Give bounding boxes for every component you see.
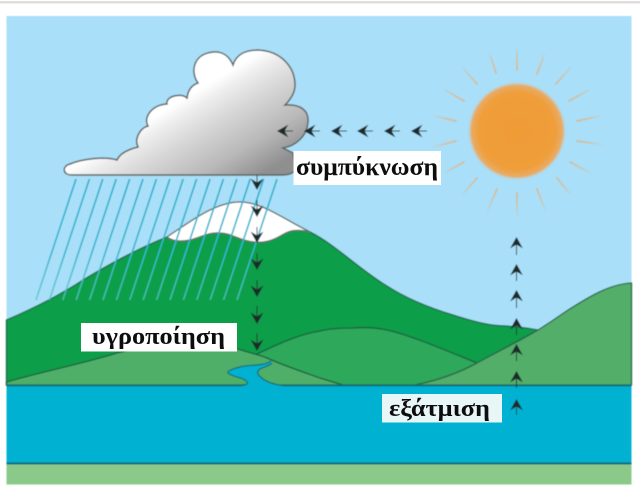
- snow cap: [167, 202, 310, 242]
- sun: [468, 82, 566, 180]
- shore land strip: [6, 464, 632, 484]
- sky background: [6, 16, 632, 388]
- label: condensation: συμπύκνωση: [296, 154, 438, 181]
- cloud: [64, 50, 308, 175]
- condensation arrows: [278, 126, 427, 136]
- label: evaporation: εξάτμιση: [389, 396, 490, 422]
- sun rays: [433, 50, 605, 215]
- lake bottom line: [6, 462, 632, 464]
- river: [228, 361, 288, 387]
- middle hill: [257, 328, 477, 385]
- back mountain: [6, 202, 538, 385]
- right hill: [415, 283, 632, 385]
- water: [6, 385, 632, 464]
- shoreline: [6, 384, 632, 386]
- rainfall arrows: [252, 175, 262, 350]
- top border line: [0, 1, 640, 4]
- rain: [36, 179, 277, 300]
- evaporation arrows: [512, 238, 522, 415]
- front hill: [6, 344, 343, 385]
- label: liquefaction: υγροποίηση: [92, 324, 225, 350]
